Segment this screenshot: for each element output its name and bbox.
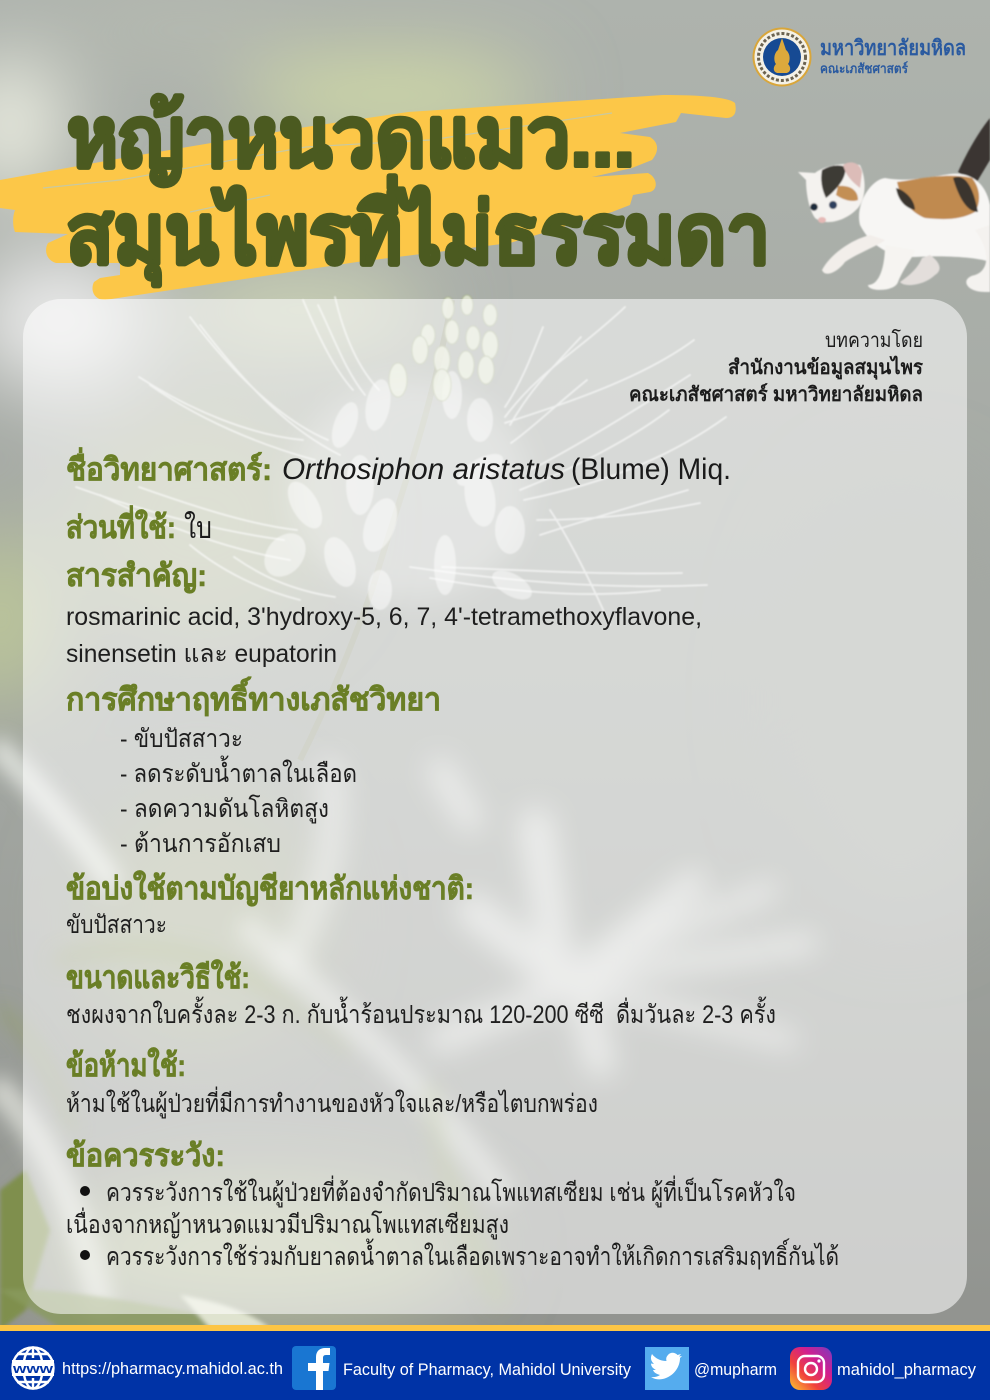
title: หญ้าหนวดแมว... <box>67 90 635 188</box>
logo text: มหาวิทยาลัยมหิดล <box>820 37 966 60</box>
section: scientific name: (Blume) Miq. <box>571 453 731 486</box>
icon: website globe <box>12 1348 54 1388</box>
logo: Mahidol University <box>752 28 966 86</box>
section: dosage: ชงผงจากใบครั้งละ 2-3 ก. กับน้ำร้อนประมาณ 120-200 ซีซี ดื่มวันละ 2-3 ครั้ง <box>66 996 776 1029</box>
flower stamens <box>76 297 726 625</box>
section: dosage <box>66 959 776 1029</box>
icon: website globe: www <box>12 1362 53 1376</box>
section: indications: ขับปัสสาวะ <box>66 911 167 939</box>
legs <box>822 235 885 274</box>
section: contraindications: ข้อห้ามใช้: <box>66 1047 186 1083</box>
section: active compounds: sinensetin และ eupatorin <box>66 640 337 668</box>
flower haze <box>290 380 530 600</box>
section: contraindications <box>66 1047 598 1119</box>
blurred foreground leaves <box>0 750 500 1300</box>
author credit: สำนักงานข้อมูลสมุนไพร <box>728 355 923 381</box>
section: active compounds: สารสำคัญ: <box>66 558 207 594</box>
title: สมุนไพรที่ไม่ธรรมดา <box>66 175 770 287</box>
footer bar <box>0 1325 990 1400</box>
section: pharmacological studies: - ขับปัสสาวะ <box>120 725 243 753</box>
section: part used: ส่วนที่ใช้: <box>66 505 176 545</box>
section: contraindications: ห้ามใช้ในผู้ป่วยที่มีการทำงานของหัวใจและ/หรือไตบกพร่อง <box>66 1086 598 1119</box>
author credit <box>629 329 923 406</box>
section: indications: ข้อบ่งใช้ตามบัญชียาหลักแห่งชาติ: <box>66 870 474 907</box>
icon: facebook <box>292 1346 336 1390</box>
icon: calico kitten <box>798 118 990 292</box>
section: precautions: เนื่องจากหญ้าหนวดแมวมีปริมาณโพแทสเซียมสูง <box>66 1207 509 1240</box>
section: precautions <box>66 1138 839 1271</box>
section: pharmacological studies: การศึกษาฤทธิ์ทางเภสัชวิทยา <box>66 676 441 717</box>
section: part used: ใบ <box>184 511 212 545</box>
section: dosage: ขนาดและวิธีใช้: <box>66 959 250 995</box>
logo text <box>820 37 966 76</box>
section: indications <box>66 870 474 939</box>
flower buds <box>389 295 498 401</box>
panel: monograph content <box>23 299 967 1314</box>
section: scientific name: ชื่อวิทยาศาสตร์: <box>66 447 272 487</box>
icon: university seal <box>752 28 812 86</box>
instagram handle: mahidol_pharmacy <box>837 1360 976 1379</box>
section: pharmacological studies <box>66 676 441 858</box>
section: pharmacological studies: - ลดระดับน้ำตาลในเลือด <box>120 755 357 788</box>
flower petals <box>256 371 537 610</box>
icon: twitter <box>645 1347 689 1390</box>
website url: https://pharmacy.mahidol.ac.th <box>62 1359 283 1378</box>
facebook name: Faculty of Pharmacy, Mahidol University <box>343 1360 631 1379</box>
logo text: คณะเภสัชศาสตร์ <box>820 61 908 76</box>
blurred lower flower <box>290 770 808 1063</box>
section: precautions: ข้อควรระวัง: <box>66 1138 225 1173</box>
section: active compounds <box>66 558 702 668</box>
section: scientific name: Orthosiphon aristatus <box>282 453 565 486</box>
title brush highlight <box>0 95 736 300</box>
section: pharmacological studies: - ลดความดันโลหิตสูง <box>120 794 329 824</box>
section: active compounds: rosmarinic acid, 3'hydroxy-5, 6, 7, 4'-tetramethoxyflavone, <box>66 603 702 631</box>
head <box>798 164 865 222</box>
section: scientific name <box>66 447 731 487</box>
author credit: คณะเภสัชศาสตร์ มหาวิทยาลัยมหิดล <box>629 383 923 406</box>
title <box>66 90 770 287</box>
author credit: บทความโดย <box>825 329 923 352</box>
section: precautions: ควรระวังการใช้ในผู้ป่วยที่ต้องจำกัดปริมาณโพแทสเซียม เช่น ผู้ที่เป็นโรคหัวใจ <box>106 1175 796 1208</box>
icon: instagram <box>790 1347 832 1390</box>
section: pharmacological studies: - ต้านการอักเสบ <box>120 830 281 858</box>
flower stem <box>300 300 452 760</box>
twitter handle: @mupharm <box>694 1360 777 1379</box>
section: precautions: ควรระวังการใช้ร่วมกับยาลดน้ำตาลในเลือดเพราะอาจทำให้เกิดการเสริมฤทธิ์กันได้ <box>106 1238 839 1271</box>
